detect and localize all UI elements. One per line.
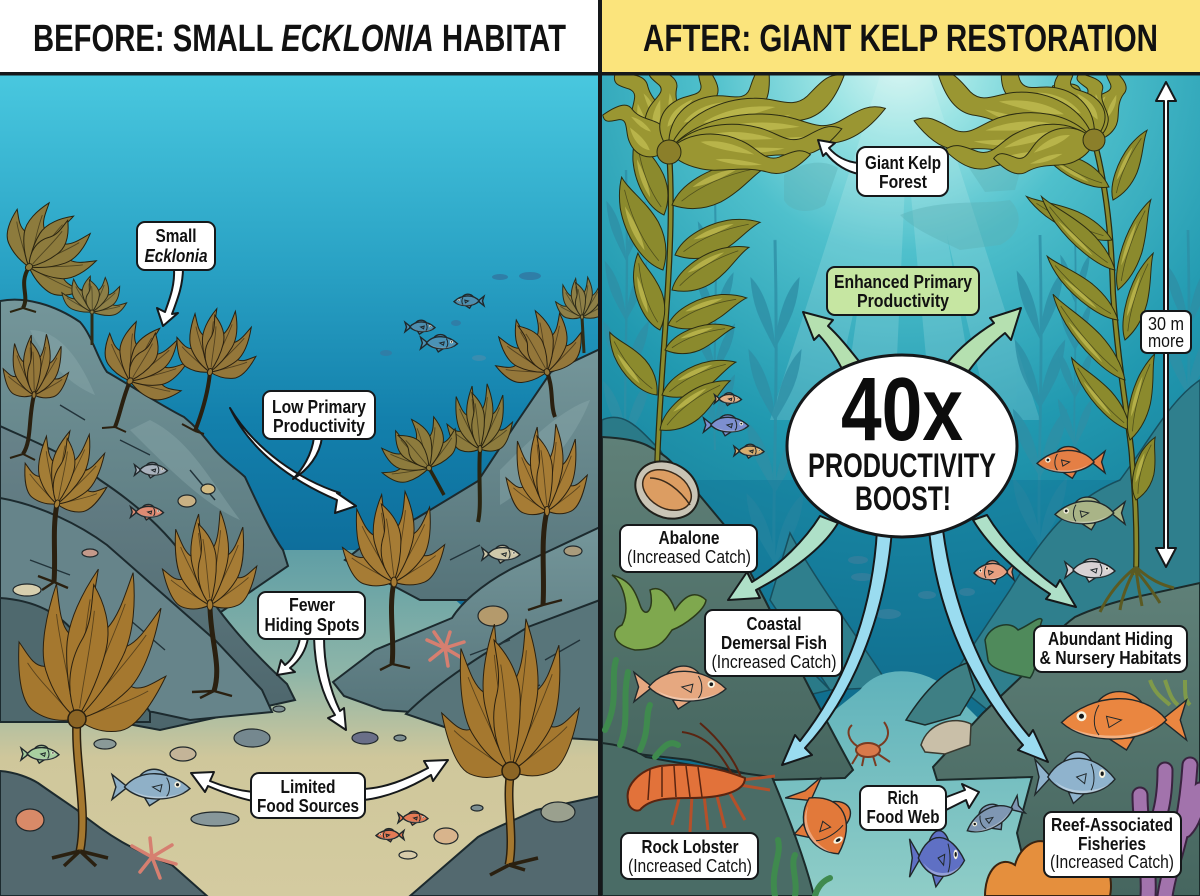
hero circle: 40x productivity boost: BOOST!: [855, 480, 951, 518]
callout: Low Primary Productivity: [263, 391, 375, 479]
plant: Ecklonia 11: [503, 423, 591, 610]
fish: large rockfish: [1062, 692, 1186, 750]
height arrow: 30 m more: 30 m: [1148, 314, 1184, 334]
callout: Rock Lobster: [621, 833, 758, 879]
coral: sponge reef: [921, 721, 971, 754]
callout: Limited Food Sources: [191, 760, 448, 818]
hero circle: 40x productivity boost: [787, 355, 1017, 537]
plant: Ecklonia 4, indicated by callout: [102, 320, 185, 433]
seagrass: right: [1150, 680, 1190, 705]
back rock: left hill: [0, 300, 288, 640]
callout: Fewer Hiding Spots: Fewer: [289, 595, 335, 615]
plant: giant kelp, left stalk: [599, 131, 774, 470]
plant: Ecklonia 14: [494, 310, 582, 418]
arrow: blue, down to reef fisheries: [929, 530, 1048, 762]
callout: Rock Lobster: (Increased Catch): [628, 856, 752, 876]
small fish on slopes: [21, 462, 520, 842]
rock: lower left: [602, 743, 814, 896]
fish: blue puffer: [910, 831, 964, 887]
plant: Ecklonia 3: [2, 334, 70, 461]
plant: Ecklonia 2: [61, 275, 128, 345]
fish: pink: [974, 561, 1014, 584]
seabed scene: before: [0, 74, 610, 896]
fish: coastal demersal: [634, 666, 726, 709]
height arrow: 30 m more: more: [1148, 331, 1184, 351]
callout: Coastal Demersal Fish: Demersal Fish: [721, 633, 827, 653]
arrow: down-right to nursery habitats: [973, 515, 1076, 607]
coral: purple: [1140, 765, 1200, 896]
sea floor channel: [760, 671, 1040, 896]
arrow: up-left to Enhanced Primary Productivity: [803, 312, 862, 375]
plant: Ecklonia 5: [176, 307, 257, 435]
background rocks: [602, 380, 1200, 720]
callout: Coastal Demersal Fish: [705, 610, 842, 676]
deep water gradient: [602, 480, 1200, 700]
callout: Small Ecklonia: Ecklonia: [144, 246, 208, 266]
seagrass: lower left: [605, 660, 678, 757]
rock: right slope: [933, 583, 1200, 896]
coral: orange: [985, 838, 1111, 896]
callout: Small Ecklonia: [137, 222, 215, 326]
mid rock: left lower band: [0, 498, 272, 720]
seagrass: bottom centre: [774, 840, 830, 896]
hero circle: 40x productivity boost: PRODUCTIVITY: [808, 447, 996, 485]
plant: Ecklonia 1, top left: [6, 202, 98, 313]
callout: Giant Kelp Forest: [818, 140, 948, 196]
abalone: [625, 450, 709, 530]
fish: blue reef fish: [1035, 752, 1115, 803]
callout: Rich Food Web: Rich: [888, 788, 918, 808]
plant: Ecklonia 7: [159, 510, 261, 698]
mid rock: left: [0, 426, 295, 730]
rock lobster: [628, 723, 775, 832]
seaweed: green clump, left: [612, 575, 706, 650]
callout: Abalone: Abalone: [658, 528, 720, 548]
callout: Low Primary Productivity: Productivity: [273, 416, 365, 436]
back rock: right: [345, 349, 600, 600]
callout: Giant Kelp Forest: Giant Kelp: [865, 153, 941, 173]
callout: Enhanced Primary Productivity: Productivity: [857, 291, 949, 311]
distant canopy shadows: [784, 158, 1022, 250]
distant fish school: [380, 272, 541, 361]
open water background: [0, 76, 598, 605]
seaweed: green clump, right: [985, 619, 1042, 678]
foreground rock: bottom right: [410, 796, 600, 896]
plant: giant kelp, right stalk: [1022, 126, 1164, 575]
callout: Fewer Hiding Spots: Hiding Spots: [264, 615, 360, 635]
distant fish silhouettes: [848, 556, 975, 619]
plant: Ecklonia 6: [24, 429, 108, 591]
header band: before: BEFORE: SMALL ECKLONIA HABITAT: [33, 18, 566, 60]
mid rock: right: [333, 527, 600, 725]
callout: Coastal Demersal Fish: (Increased Catch): [712, 652, 836, 672]
lit water background: [602, 76, 1200, 770]
fish: pale grey: [1065, 559, 1115, 582]
fish: bass: [1055, 497, 1125, 530]
callout: Reef-Associated Fisheries: (Increased Catch): [1050, 852, 1174, 872]
background kelp stalks: [604, 170, 1200, 600]
sea stars and urchins: [132, 632, 464, 878]
sandy floor: [0, 550, 600, 896]
callout: Abalone: (Increased Catch): [627, 547, 751, 567]
callout: Coastal Demersal Fish: Coastal: [746, 614, 802, 634]
plant: Ecklonia 15: [554, 276, 598, 354]
hero circle: 40x productivity boost: 40x: [841, 360, 963, 460]
callout: Small Ecklonia: Small: [156, 226, 196, 246]
arrow: blue, down to rock lobster: [782, 530, 892, 765]
callout: Rich Food Web: Food Web: [866, 807, 940, 827]
callout: Low Primary Productivity: Low Primary: [272, 397, 366, 417]
callout: Reef-Associated Fisheries: Fisheries: [1078, 834, 1146, 854]
arrow: down-left to coastal fish: [728, 516, 838, 600]
panel: before, small Ecklonia habitat: [0, 0, 610, 896]
rock: left slope: [602, 437, 853, 780]
header band: before: [0, 0, 599, 73]
callout: Limited Food Sources: Food Sources: [257, 796, 359, 816]
callout: Rich Food Web: [860, 784, 979, 830]
arrow: up-right to Enhanced Primary Productivity: [948, 308, 1021, 372]
pebbles and shells: [13, 484, 582, 859]
callout: Rock Lobster: Rock Lobster: [642, 837, 738, 857]
callout: Giant Kelp Forest: Forest: [879, 172, 927, 192]
rock: centre outcrop: [906, 663, 975, 725]
plant: Ecklonia 9: [339, 491, 449, 670]
header band: after: [602, 0, 1200, 73]
callout: Abundant Hiding & Nursery Habitats: [1034, 626, 1187, 672]
callout: Abalone: [620, 525, 757, 572]
plant: giant kelp, left canopy: [595, 52, 890, 175]
plant: large Ecklonia, foreground right: [437, 618, 585, 875]
callout: Reef-Associated Fisheries: Reef-Associated: [1051, 815, 1173, 835]
fish: blue, foreground: [112, 769, 190, 806]
fish: reef fish group upper left: [704, 393, 764, 458]
callout: Reef-Associated Fisheries: [1044, 812, 1181, 877]
callout: Limited Food Sources: Limited: [280, 777, 336, 797]
callout: Abundant Hiding & Nursery Habitats: & Nursery Habitats: [1040, 648, 1182, 668]
front rock: left: [0, 598, 150, 722]
callout: Abundant Hiding & Nursery Habitats: Abundant Hiding: [1048, 629, 1173, 649]
light rays: [770, 76, 1040, 420]
kelp forest scene: [595, 44, 1200, 896]
callout: Enhanced Primary Productivity: Enhanced Primary: [834, 272, 972, 292]
callout: Fewer Hiding Spots: [258, 592, 365, 730]
rock highlights: [30, 330, 590, 520]
front rock: right: [406, 600, 600, 740]
foreground rock: bottom left: [0, 771, 207, 896]
fish: grey, lying: [961, 792, 1027, 843]
fish: orange anglerfish: [776, 773, 866, 868]
plant: large Ecklonia, foreground left: [18, 568, 167, 868]
plant: Ecklonia 13: [380, 416, 457, 496]
plant: giant kelp, right canopy: [912, 44, 1131, 179]
callout: Enhanced Primary Productivity: [827, 267, 979, 315]
panel: after, giant kelp restoration: [595, 0, 1200, 896]
fish: orange, right slope: [1037, 447, 1105, 478]
holdfast: right kelp: [1100, 567, 1174, 612]
crab: [849, 722, 890, 766]
arrow: low primary productivity: [230, 408, 356, 513]
rock cracks: [30, 405, 580, 700]
height arrow: 30 m more: [1141, 82, 1191, 567]
plant: Ecklonia 12: [445, 383, 515, 522]
